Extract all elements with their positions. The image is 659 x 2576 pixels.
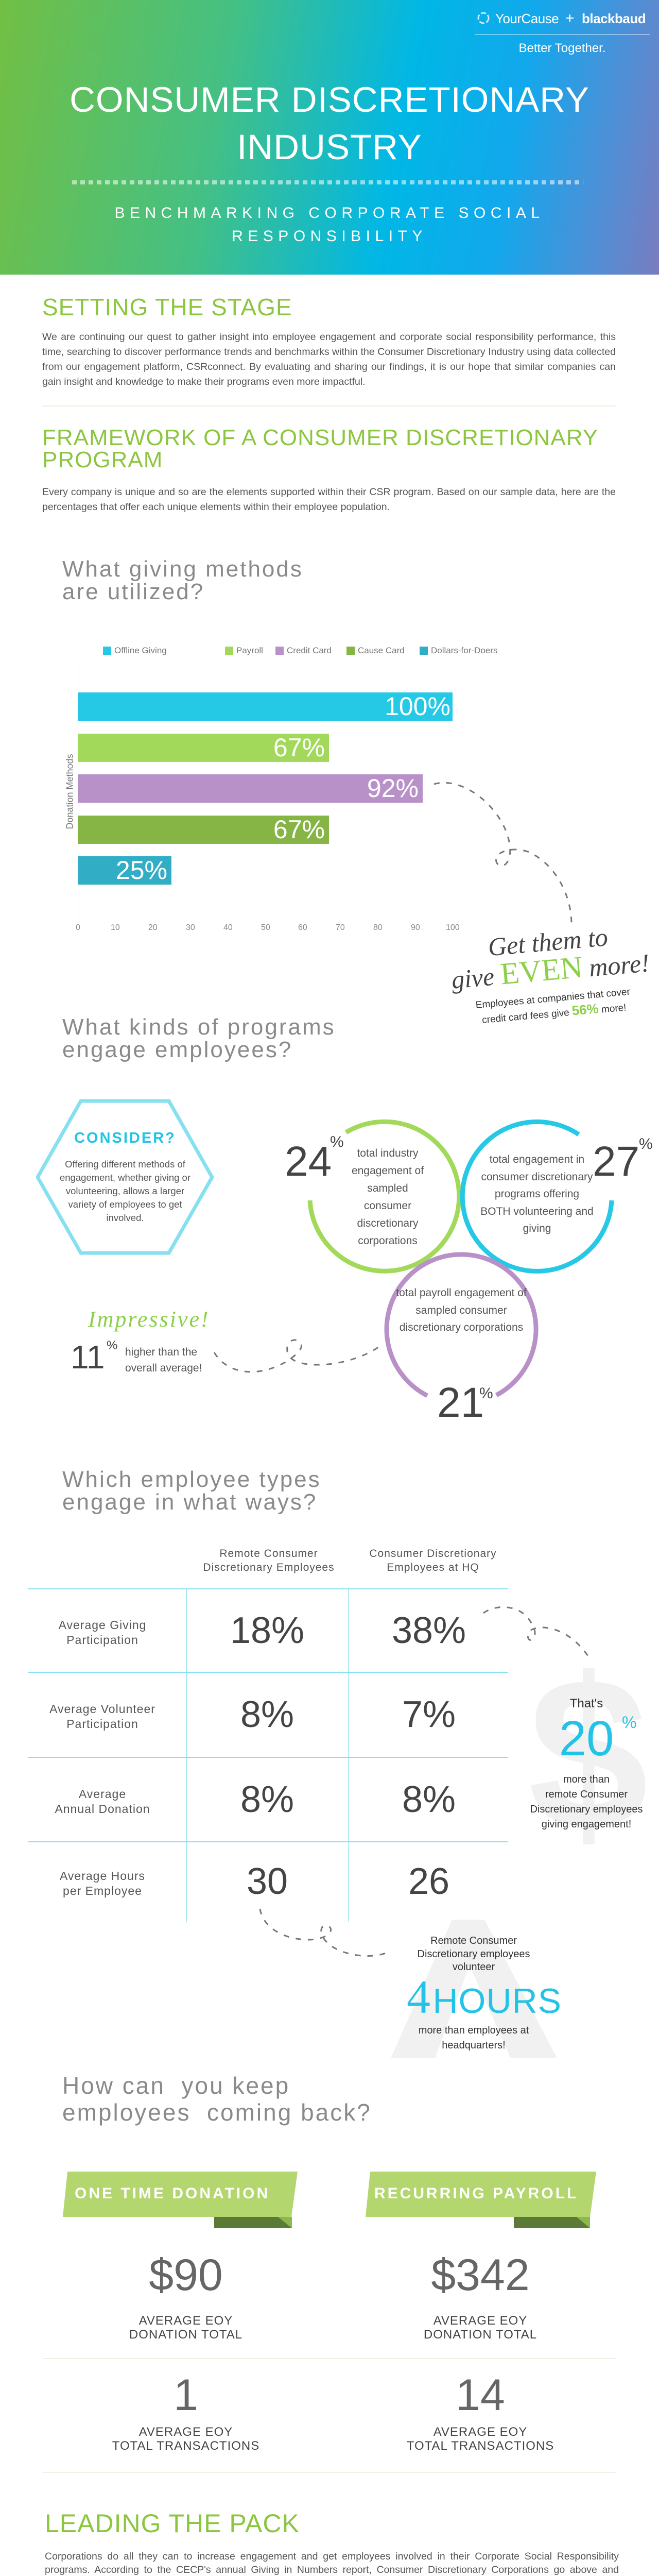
- table: employee types: 7%: [402, 1694, 456, 1735]
- table: employee types: Annual Donation: [55, 1802, 150, 1816]
- stat: 27%: total engagement in consumer discretionary programs offering BOTH volunteering and giving: [480, 1154, 594, 1234]
- question: giving methods: are utilized?: [62, 579, 204, 604]
- subtitle: [114, 205, 545, 245]
- label: avg donation left: AVERAGE EOY: [139, 2314, 233, 2328]
- callout: give even more: [450, 922, 651, 1026]
- callout: give even more: give EVEN more!: [450, 948, 651, 994]
- callout: 4 hours: 4 HOURS: [407, 1971, 562, 2023]
- table: employee types: Average: [79, 1787, 126, 1801]
- table: employee types: 26: [408, 1861, 449, 1902]
- table: employee types: Discretionary Employees: [203, 1562, 335, 1573]
- arrow: hours to 4 hours callout: [259, 1908, 385, 1957]
- callout: 4 hours: volunteer: [453, 1961, 495, 1973]
- table: employee types: Average Hours: [60, 1869, 145, 1883]
- table: employee types: 30: [247, 1861, 288, 1902]
- stat: 14 transactions: 14: [456, 2370, 505, 2420]
- callout: impressive: 11: [71, 1338, 105, 1376]
- callout: give even more: Get them to: [487, 922, 609, 961]
- x axis labels: [76, 923, 460, 932]
- subtitle: RESPONSIBILITY: [232, 228, 427, 245]
- callout: that's 20%: more than: [563, 1774, 610, 1785]
- header banner: [0, 0, 659, 275]
- heading: leading the pack: LEADING THE PACK: [45, 2509, 300, 2538]
- stat: 21%: total payroll engagement of sampled consumer discretionary corporations: [396, 1287, 527, 1333]
- x axis labels: 60: [298, 923, 307, 932]
- x axis labels: 10: [111, 923, 120, 932]
- table: employee types: 8%: [402, 1779, 456, 1820]
- stat: 24%: 24: [285, 1138, 332, 1185]
- title: [70, 80, 589, 167]
- question: giving methods: [62, 556, 303, 604]
- logo: YourCause: [495, 11, 559, 26]
- question: giving methods: What giving methods: [62, 556, 303, 582]
- stat: $90: $90: [149, 2250, 223, 2300]
- legend: Offline Giving: [114, 646, 167, 655]
- table: employee types: Average Volunteer: [49, 1702, 155, 1716]
- label: transactions right: AVERAGE EOY: [433, 2425, 527, 2439]
- question: employee types: engage in what ways?: [62, 1489, 317, 1515]
- x axis labels: 30: [186, 923, 195, 932]
- table: employee types: Consumer Discretionary: [369, 1548, 497, 1560]
- table: employee types: 38%: [392, 1610, 466, 1651]
- row labels: Participation: [66, 1633, 138, 1647]
- table: employee types: Employees at HQ: [387, 1562, 479, 1573]
- label: transactions right: TOTAL TRANSACTIONS: [407, 2439, 554, 2453]
- question: coming back: [62, 2072, 372, 2126]
- callout: 4 hours: headquarters!: [442, 2040, 506, 2051]
- ribbon: one time donation: ONE TIME DONATION: [75, 2185, 270, 2202]
- question: programs: [62, 1014, 336, 1062]
- title: INDUSTRY: [237, 127, 422, 167]
- callout: give even more: Employees at companies that cover: [475, 987, 631, 1011]
- question: employee types: Which employee types: [62, 1467, 321, 1492]
- table: employee types: per Employee: [63, 1884, 142, 1897]
- label: avg donation left: DONATION TOTAL: [129, 2328, 242, 2342]
- x axis labels: 70: [336, 923, 345, 932]
- x axis labels: 50: [261, 923, 270, 932]
- ribbon: recurring payroll: [366, 2172, 596, 2228]
- x axis labels: 80: [373, 923, 383, 932]
- tagline: Better Together.: [518, 41, 605, 55]
- callout: impressive: overall average!: [125, 1362, 202, 1374]
- table: employee types: Participation: [66, 1717, 138, 1731]
- x axis labels: 90: [411, 923, 420, 932]
- legend: Dollars-for-Doers: [431, 646, 497, 655]
- label: transactions left: [112, 2425, 259, 2453]
- ribbon: recurring payroll: RECURRING PAYROLL: [374, 2185, 578, 2202]
- callout: that's 20%: giving engagement!: [542, 1819, 631, 1830]
- stat: 1 transaction: 1: [174, 2370, 198, 2420]
- label: avg donation right: DONATION TOTAL: [424, 2328, 537, 2342]
- legend: [103, 646, 497, 655]
- question: coming back: How can you keep: [62, 2072, 290, 2099]
- bars: 100%: [385, 692, 450, 721]
- label: avg donation left: [129, 2314, 242, 2342]
- callout: that's 20%: Discretionary employees: [530, 1804, 643, 1815]
- callout: that's 20%: remote Consumer: [545, 1789, 628, 1800]
- callout: impressive: %: [107, 1338, 117, 1352]
- heading: setting the stage: SETTING THE STAGE: [42, 294, 292, 320]
- x axis labels: 20: [148, 923, 158, 932]
- callout: impressive: higher than the: [125, 1346, 197, 1358]
- text: framework: Every company is unique and so are the elements supported within their CSR program. Based on our sample data, here are the percentages that offer each unique elements within their employee population.: [42, 486, 616, 513]
- stat: $342: $342: [431, 2250, 530, 2300]
- text: setting the stage: We are continuing our quest to gather insight into employee engagement and corporate social responsibility performance, this time, searching to discover performance trends and benchmarks within the Consumer Discretionary Industry using data collected from our engagement platform, CSRconnect. By evaluating and sharing our findings, it is our hope that similar companies can gain insight and knowledge to make their programs even more impactful.: [42, 331, 616, 387]
- arrow: 38% to 20% callout: [483, 1606, 588, 1656]
- bar chart: 67%: [273, 815, 325, 844]
- callout: give even more: credit card fees give 56% more!: [481, 1001, 627, 1026]
- table: employee types: 8%: [240, 1694, 294, 1735]
- x axis labels: 0: [76, 923, 80, 932]
- logo: +: [565, 10, 575, 27]
- stat: 27%: %: [639, 1136, 653, 1153]
- question: programs: What kinds of programs: [62, 1014, 336, 1040]
- legend: Payroll: [236, 646, 263, 655]
- x axis labels: 100: [446, 923, 460, 932]
- stat: 24%: [285, 1133, 424, 1247]
- table: employee types: [28, 1548, 508, 1922]
- label: transactions left: AVERAGE EOY: [139, 2425, 233, 2439]
- callout: impressive: Impressive!: [88, 1307, 210, 1332]
- title: CONSUMER DISCRETIONARY: [70, 80, 589, 120]
- table: employee types: Remote Consumer: [219, 1548, 318, 1560]
- legend: Cause Card: [358, 646, 405, 655]
- arrow: impressive to circle: [213, 1339, 379, 1372]
- callout: 4 hours: more than employees at: [419, 2025, 529, 2036]
- bar chart: [65, 646, 497, 932]
- panel: consider hexagon: CONSIDER?: [74, 1130, 176, 1146]
- callout: that's 20%: %: [622, 1713, 636, 1732]
- arrow: dashed curve to callout: [433, 782, 573, 922]
- stat: 27%: 27: [593, 1138, 639, 1185]
- panel: consider hexagon: [36, 1099, 214, 1255]
- label: transactions right: [407, 2425, 554, 2453]
- panel: consider hexagon: Offering different methods of engagement, whether giving or volunteering, allows a larger variety of employees to get involved.: [60, 1159, 190, 1223]
- question: employee types: [62, 1467, 321, 1515]
- values: 18%: [230, 1610, 304, 1651]
- callout: 4 hours: [391, 1920, 562, 2058]
- callout: impressive: [71, 1307, 210, 1376]
- stat: 21%: [396, 1287, 527, 1426]
- bar chart: 92%: [367, 774, 419, 803]
- bar chart: 67%: [273, 733, 325, 762]
- label: avg donation right: AVERAGE EOY: [433, 2314, 527, 2328]
- legend: Credit Card: [287, 646, 332, 655]
- heading: framework: FRAMEWORK OF A CONSUMER DISCRETIONARY PROGRAM: [42, 425, 598, 472]
- stat: 24%: total industry engagement of sampled consumer discretionary corporations: [352, 1147, 424, 1247]
- logo: [478, 10, 646, 27]
- question: programs: engage employees?: [62, 1037, 292, 1062]
- bar chart: 25%: [116, 856, 167, 885]
- callout: that's 20%: 20: [559, 1711, 614, 1766]
- stat: 27%: [480, 1136, 653, 1234]
- x axis labels: 40: [223, 923, 233, 932]
- label: avg donation right: [424, 2314, 537, 2342]
- question: coming back: employees coming back?: [62, 2099, 372, 2126]
- axis label: Donation Methods: [65, 754, 75, 829]
- logo: blackbaud: [582, 11, 646, 26]
- stat: 21%: %: [479, 1385, 493, 1402]
- callout: 4 hours: Remote Consumer: [430, 1935, 517, 1946]
- chart: engagement circles: [308, 1119, 614, 1398]
- ribbon: one time donation: [63, 2172, 298, 2228]
- subtitle: BENCHMARKING CORPORATE SOCIAL: [114, 205, 545, 222]
- row labels: Average Giving: [59, 1618, 146, 1632]
- row labels: [59, 1618, 146, 1647]
- label: transactions left: TOTAL TRANSACTIONS: [112, 2439, 259, 2453]
- stat: 24%: %: [330, 1133, 344, 1150]
- stat: 21%: 21: [437, 1379, 484, 1426]
- callout: 4 hours: Discretionary employees: [417, 1948, 530, 1960]
- callout: that's 20%: That's: [570, 1697, 603, 1710]
- table: employee types: 8%: [240, 1779, 294, 1820]
- bars: [78, 692, 453, 721]
